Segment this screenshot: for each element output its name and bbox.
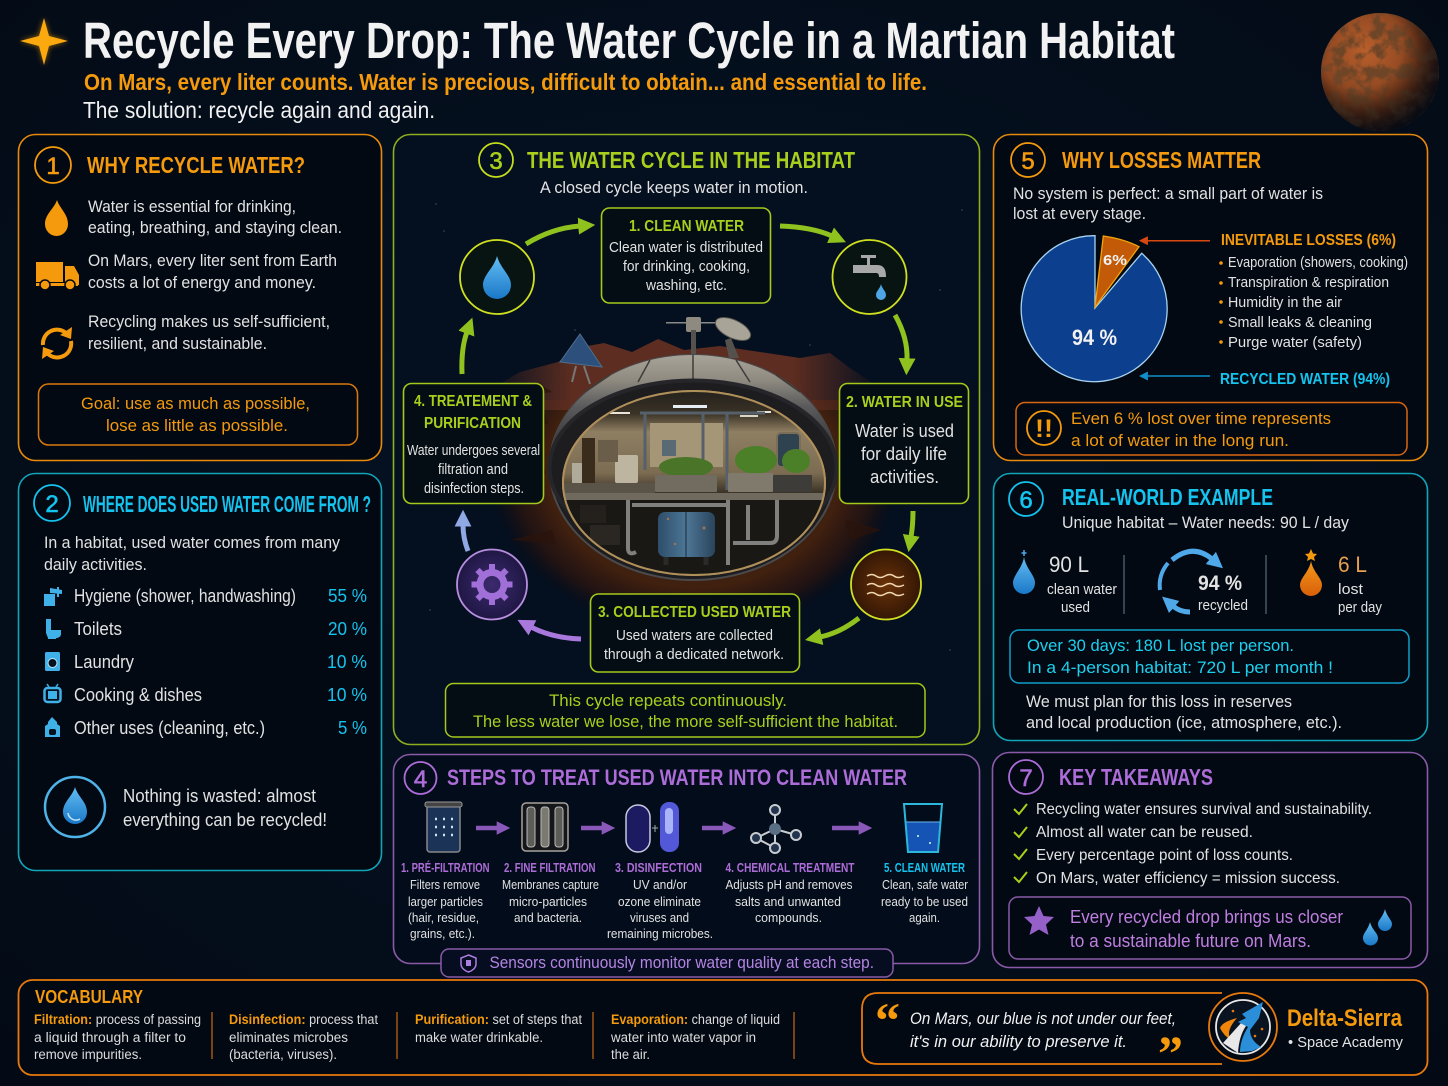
definition: filtration bbox=[34, 1012, 201, 1062]
callout: closer to future: to a sustainable future on Mars. bbox=[1070, 931, 1311, 951]
text: cost from Earth bbox=[88, 251, 337, 292]
definition: evaporation: water into water vapor in bbox=[610, 1030, 756, 1045]
row: cooking bbox=[44, 684, 367, 705]
icon: four-point star bbox=[20, 18, 68, 65]
step box: treatment and purification: PURIFICATION bbox=[424, 415, 521, 432]
list: loss causes bbox=[1219, 254, 1408, 351]
icon: waves circle bbox=[851, 550, 921, 620]
step 2 text: and bacteria. bbox=[514, 910, 582, 925]
step box: clean water: washing, etc. bbox=[645, 277, 727, 294]
row: other uses: 5 % bbox=[338, 718, 367, 738]
step 4 text: salts and unwanted bbox=[735, 894, 841, 909]
panel: where used water comes from bbox=[18, 474, 382, 870]
vocabulary heading: VOCABULARY bbox=[35, 987, 143, 1007]
icon: recycle arrows bbox=[42, 327, 72, 359]
arrow bbox=[581, 826, 603, 830]
step 1 text: grains, etc.). bbox=[410, 926, 475, 941]
heading: KEY TAKEAWAYS bbox=[1059, 764, 1213, 790]
step 3 text: 3. DISINFECTION bbox=[615, 860, 702, 875]
brand name: • Space Academy bbox=[1288, 1034, 1403, 1051]
step 4 text: Adjusts pH and removes bbox=[726, 877, 853, 892]
definition: purification: Purification: set of steps that bbox=[415, 1012, 582, 1027]
subtitle: On Mars, every liter counts. Water is precious, difficult to obtain... and essential to life. bbox=[84, 69, 927, 95]
intro text bbox=[1013, 184, 1323, 223]
step box: water in use bbox=[840, 384, 968, 504]
step box: clean water: Clean water is distributed bbox=[609, 239, 763, 256]
text: cost from Earth: On Mars, every liter sent from Earth bbox=[88, 251, 337, 270]
step box: treatment and purification: filtration and bbox=[438, 462, 508, 478]
definition: disinfection bbox=[229, 1012, 378, 1062]
callout: monthly loss bbox=[1010, 630, 1409, 683]
arrow: clean water to tap bbox=[780, 226, 832, 236]
number badge 4: 4 bbox=[414, 766, 427, 793]
step 5 text: ready to be used bbox=[881, 894, 968, 909]
step 3 text bbox=[607, 860, 713, 941]
habitat shell bbox=[550, 355, 836, 580]
heading: REAL-WORLD EXAMPLE bbox=[1062, 484, 1273, 510]
number badge 7: 7 bbox=[1019, 765, 1033, 792]
definition: filtration: remove impurities. bbox=[34, 1047, 142, 1062]
callout: six percent: a lot of water in the long run. bbox=[1071, 431, 1289, 450]
list: checks: Every percentage point of loss counts. bbox=[1036, 847, 1293, 864]
number badge 3: 3 bbox=[489, 148, 503, 175]
list: loss causes: Purge water (safety) bbox=[1228, 334, 1362, 351]
step box: water in use: activities. bbox=[870, 467, 939, 487]
definition: disinfection: eliminates microbes bbox=[229, 1030, 348, 1045]
step 1 text: 1. PRÉ-FILTRATION bbox=[401, 860, 490, 875]
step 4 text: 4. CHEMICAL TREATMENT bbox=[726, 860, 855, 875]
step box: treatment and purification: Water undergoes several bbox=[407, 443, 540, 459]
definition: disinfection: Disinfection: process that bbox=[229, 1012, 378, 1027]
header bbox=[20, 12, 1440, 132]
definition: filtration: Filtration: process of passing bbox=[34, 1012, 201, 1027]
step 3 text: UV and/or bbox=[633, 877, 688, 892]
list: checks: Recycling water ensures survival and sustainability. bbox=[1036, 801, 1372, 818]
step 4 text bbox=[726, 860, 855, 925]
arrow: recycled leader bbox=[1147, 375, 1210, 377]
step 1 text: larger particles bbox=[408, 894, 483, 909]
stat: lost per day bbox=[1300, 549, 1382, 616]
stat: clean water used: clean water bbox=[1047, 581, 1117, 598]
stat: lost per day: 6 L bbox=[1338, 552, 1367, 577]
panel: real-world example bbox=[994, 474, 1428, 740]
icon: gear circle bbox=[457, 550, 527, 620]
callout: goal bbox=[38, 384, 358, 445]
intro text: In a habitat, used water comes from many bbox=[44, 533, 340, 552]
row: hygiene: Hygiene (shower, handwashing) bbox=[74, 586, 296, 606]
number badge 7 bbox=[1009, 760, 1043, 794]
subheading: A closed cycle keeps water in motion. bbox=[540, 178, 808, 197]
panel: key takeaways bbox=[992, 752, 1428, 968]
number badge 6 bbox=[1009, 482, 1043, 516]
intro text: lost at every stage. bbox=[1013, 204, 1146, 223]
pie chart: 94 percent recycled, 6 percent lost: 94 % bbox=[1072, 325, 1117, 350]
number badge 2 bbox=[34, 485, 70, 521]
step 5 text bbox=[881, 860, 969, 925]
arrow: tap to water in use bbox=[895, 315, 907, 360]
step box: treatment and purification bbox=[404, 384, 544, 504]
quote box bbox=[862, 992, 1222, 1081]
number badge 4 bbox=[404, 762, 436, 794]
stat: lost per day: lost bbox=[1338, 581, 1364, 598]
text: essential: Water is essential for drinking, bbox=[88, 197, 296, 216]
definition: filtration: a liquid through a filter to bbox=[34, 1030, 186, 1045]
heading: WHY RECYCLE WATER? bbox=[87, 152, 305, 178]
row: other uses: Other uses (cleaning, etc.) bbox=[74, 718, 265, 738]
step 3 text: ozone eliminate bbox=[618, 894, 701, 909]
stat: lost per day: per day bbox=[1338, 599, 1382, 616]
heading: STEPS TO TREAT USED WATER INTO CLEAN WATER bbox=[447, 765, 907, 790]
icon: UV and ozone disinfection bbox=[626, 802, 679, 852]
icon: truck bbox=[36, 262, 79, 290]
intro text: daily activities. bbox=[44, 555, 147, 574]
arrow: purification to drop bbox=[462, 332, 467, 374]
panel: vocabulary and quote footer bbox=[18, 980, 1428, 1081]
logo: Delta-Sierra rocket bbox=[1209, 993, 1277, 1061]
step box: clean water bbox=[602, 208, 770, 303]
icon: glass of clean water bbox=[904, 804, 942, 852]
step box: collected used water: through a dedicated network. bbox=[604, 646, 784, 663]
subheading: Unique habitat – Water needs: 90 L / day bbox=[1062, 513, 1349, 532]
row: hygiene: 55 % bbox=[328, 586, 367, 606]
arrow: waves to collected water bbox=[820, 618, 859, 637]
callout: nothing is wasted: Nothing is wasted: almost bbox=[123, 786, 316, 806]
callout: monthly loss: In a 4-person habitat: 720 L per month ! bbox=[1027, 658, 1333, 677]
arrow: drop to clean water bbox=[526, 226, 580, 244]
callout: cycle repeats: This cycle repeats continuously. bbox=[549, 691, 787, 710]
definition: evaporation: the air. bbox=[611, 1047, 650, 1062]
arrow bbox=[476, 826, 498, 830]
row: toilets: Toilets bbox=[74, 619, 122, 639]
heading: WHY LOSSES MATTER bbox=[1062, 147, 1261, 173]
pie chart: 94 percent recycled, 6 percent lost bbox=[1021, 236, 1167, 382]
callout: cycle repeats: The less water we lose, the more self-sufficient the habitat. bbox=[473, 712, 898, 731]
definition: purification bbox=[415, 1012, 582, 1045]
list: loss causes: Humidity in the air bbox=[1228, 294, 1342, 311]
row: toilets bbox=[46, 619, 367, 639]
panel: why losses matter bbox=[994, 134, 1428, 460]
brand name bbox=[1287, 1005, 1403, 1051]
stat: clean water used: used bbox=[1061, 599, 1090, 616]
callout: sensors bbox=[441, 949, 893, 977]
arrow: collected water to treatment bbox=[531, 627, 581, 639]
icon: pre-filter bbox=[425, 802, 462, 852]
callout: cycle repeats bbox=[446, 684, 925, 737]
step box: water in use: Water is used bbox=[855, 421, 954, 441]
callout: monthly loss: Over 30 days: 180 L lost per person. bbox=[1027, 636, 1294, 655]
step box: treatment and purification: 4. TREATEMENT & bbox=[414, 393, 532, 410]
losses heading: INEVITABLE LOSSES (6%) bbox=[1221, 232, 1396, 249]
text: self-sufficiency: Recycling makes us self-sufficient, bbox=[88, 312, 330, 331]
step 5 text: 5. CLEAN WATER bbox=[884, 860, 965, 875]
step 2 text: 2. FINE FILTRATION bbox=[504, 860, 596, 875]
arrow: losses leader bbox=[1147, 240, 1210, 242]
intro text: No system is perfect: a small part of water is bbox=[1013, 184, 1323, 203]
quote box: On Mars, our blue is not under our feet, bbox=[910, 1010, 1176, 1028]
step 4 text: compounds. bbox=[755, 910, 822, 925]
callout: closer to future: Every recycled drop brings us closer bbox=[1070, 907, 1343, 927]
text: plan for losses: and local production (ice, atmosphere, etc.). bbox=[1026, 713, 1342, 732]
definition: purification: make water drinkable. bbox=[415, 1030, 543, 1045]
recycled label: RECYCLED WATER (94%) bbox=[1220, 371, 1390, 388]
text: self-sufficiency: resilient, and sustainable. bbox=[88, 334, 267, 353]
title: Recycle Every Drop: The Water Cycle in a Martian Habitat bbox=[83, 12, 1175, 69]
step 1 text: Filters remove bbox=[410, 877, 480, 892]
row: laundry bbox=[45, 652, 367, 672]
icon: water drop circle bbox=[460, 240, 534, 314]
text: plan for losses bbox=[1026, 692, 1342, 732]
row: toilets: 20 % bbox=[328, 619, 367, 639]
definition: disinfection: (bacteria, viruses). bbox=[229, 1047, 337, 1062]
step 2 text bbox=[502, 860, 599, 925]
step box: water in use: 2. WATER IN USE bbox=[846, 394, 963, 411]
number badge 5: 5 bbox=[1021, 148, 1035, 175]
arrow: gear to purification bbox=[463, 525, 468, 551]
illustration: Mars planet bbox=[1320, 12, 1440, 132]
step box: collected used water bbox=[590, 594, 800, 672]
number badge 2: 2 bbox=[45, 491, 59, 518]
text: self-sufficiency bbox=[88, 312, 330, 353]
arrow bbox=[832, 826, 860, 830]
row: other uses bbox=[45, 717, 367, 738]
panel: why recycle water bbox=[18, 134, 382, 460]
callout: six percent bbox=[1016, 402, 1407, 455]
definition: evaporation: Evaporation: change of liquid bbox=[611, 1012, 780, 1027]
pie chart: 94 percent recycled, 6 percent lost: 6% bbox=[1103, 252, 1127, 269]
stat: recycled: recycled bbox=[1198, 597, 1248, 614]
text: cost from Earth: costs a lot of energy and money. bbox=[88, 273, 316, 292]
callout: closer to future bbox=[1009, 897, 1411, 959]
stat: clean water used bbox=[1013, 550, 1117, 616]
row: laundry: 10 % bbox=[327, 652, 367, 672]
text: essential bbox=[88, 197, 342, 237]
number badge 1 bbox=[35, 147, 71, 183]
list: loss causes: Small leaks & cleaning bbox=[1228, 314, 1372, 331]
step 2 text: Membranes capture bbox=[502, 877, 599, 892]
number badge 6: 6 bbox=[1019, 487, 1033, 514]
step box: treatment and purification: disinfection steps. bbox=[424, 481, 524, 497]
tagline: The solution: recycle again and again. bbox=[83, 97, 435, 123]
icon: tap circle bbox=[832, 240, 906, 314]
list: loss causes: Transpiration & respiration bbox=[1228, 274, 1389, 291]
text: plan for losses: We must plan for this loss in reserves bbox=[1026, 692, 1292, 711]
number badge 3 bbox=[479, 143, 513, 177]
brand name: Delta-Sierra bbox=[1287, 1005, 1403, 1032]
callout: goal: lose as little as possible. bbox=[106, 416, 288, 435]
callout: sensors: Sensors continuously monitor water quality at each step. bbox=[490, 954, 874, 972]
icon: molecule bbox=[751, 805, 801, 853]
callout: nothing is wasted: everything can be recycled! bbox=[123, 810, 327, 830]
step box: collected used water: 3. COLLECTED USED WATER bbox=[598, 604, 791, 621]
number badge 1: 1 bbox=[46, 153, 60, 180]
step box: clean water: for drinking, cooking, bbox=[623, 258, 750, 275]
icon: fine filter bbox=[522, 803, 568, 851]
arrow: water in use to collection bbox=[911, 511, 913, 537]
list: loss causes: Evaporation (showers, cooking) bbox=[1228, 254, 1408, 271]
quote box: it's in our ability to preserve it. bbox=[910, 1033, 1127, 1051]
row: laundry: Laundry bbox=[74, 652, 134, 672]
step 2 text: micro-particles bbox=[509, 894, 587, 909]
step 5 text: Clean, safe water bbox=[882, 877, 969, 892]
heading: THE WATER CYCLE IN THE HABITAT bbox=[527, 147, 855, 173]
callout: nothing is wasted bbox=[45, 777, 327, 837]
stat: recycled: 94 % bbox=[1198, 572, 1242, 595]
step 1 text bbox=[401, 860, 490, 941]
step 1 text: (hair, residue, bbox=[408, 910, 479, 925]
callout: six percent: Even 6 % lost over time represents bbox=[1071, 409, 1331, 428]
stat: clean water used: 90 L bbox=[1049, 552, 1089, 577]
list: checks: Almost all water can be reused. bbox=[1036, 824, 1253, 841]
heading: WHERE DOES USED WATER COME FROM ? bbox=[83, 491, 371, 517]
callout: goal: Goal: use as much as possible, bbox=[81, 394, 310, 413]
arrow bbox=[702, 826, 724, 830]
list: checks bbox=[1014, 801, 1372, 887]
row: cooking: 10 % bbox=[327, 685, 367, 705]
panel: treatment steps bbox=[394, 754, 980, 977]
row: cooking: Cooking & dishes bbox=[74, 685, 202, 705]
number badge 5 bbox=[1011, 143, 1045, 177]
intro text bbox=[44, 533, 340, 574]
step 3 text: viruses and bbox=[630, 910, 689, 925]
step box: water in use: for daily life bbox=[861, 444, 947, 464]
step box: clean water: 1. CLEAN WATER bbox=[629, 218, 744, 235]
icon: water drop bbox=[45, 200, 68, 236]
definition: evaporation bbox=[610, 1012, 780, 1062]
stat: recycled bbox=[1160, 551, 1248, 614]
list: checks: On Mars, water efficiency = mission success. bbox=[1036, 870, 1340, 887]
panel: water cycle bbox=[394, 134, 980, 744]
step box: collected used water: Used waters are collected bbox=[616, 627, 773, 644]
quote box: “ bbox=[875, 992, 900, 1048]
quote box: ” bbox=[1158, 1025, 1183, 1081]
text: essential: eating, breathing, and staying clean. bbox=[88, 218, 342, 237]
illustration: habitat cross-section bbox=[502, 317, 884, 602]
step 3 text: remaining microbes. bbox=[607, 926, 713, 941]
step 5 text: again. bbox=[909, 910, 940, 925]
callout: six percent: !! bbox=[1035, 415, 1053, 443]
